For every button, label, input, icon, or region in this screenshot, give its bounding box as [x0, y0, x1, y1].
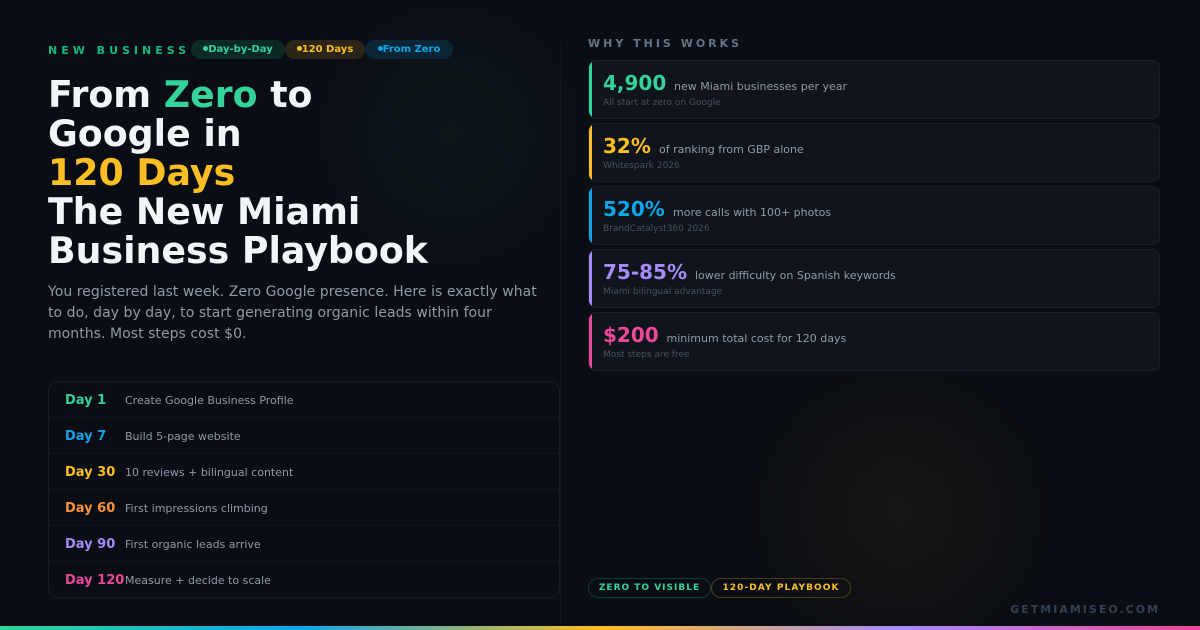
timeline row: day 7: Day 7: [65, 429, 106, 444]
stat card: 32%: Whitespark 2026: [603, 161, 680, 171]
stat card: 4,900: [588, 60, 1160, 119]
stat card: 520%: more calls with 100+ photos: [673, 206, 831, 219]
stat card: 520%: BrandCatalyst360 2026: [603, 224, 710, 234]
subtitle: [48, 284, 537, 342]
pill: 120 Days: [285, 40, 365, 59]
stat card: $200: minimum total cost for 120 days: [666, 332, 846, 345]
timeline row: day 60: [49, 490, 559, 526]
subtitle: to do, day by day, to start generating organic leads within four: [48, 305, 492, 321]
stat card: 32%: of ranking from GBP alone: [659, 143, 804, 156]
stat card: 4,900: 4,900: [603, 71, 666, 95]
pill: Day-by-Day: [191, 40, 285, 59]
stat card: 75-85%: 75-85%: [603, 260, 687, 284]
stat card: $200: Most steps are free: [603, 350, 690, 360]
tag: 120-day playbook: 120-DAY PLAYBOOK: [722, 583, 840, 593]
stat card: 32%: 32%: [603, 134, 651, 158]
title: The New Miami: [48, 190, 360, 233]
pill: Day-by-Day: Day-by-Day: [208, 44, 273, 55]
tag: 120-day playbook: [711, 578, 851, 598]
timeline row: day 90: Day 90: [65, 537, 115, 552]
pill: From Zero: [365, 40, 453, 59]
stat card: 75-85%: lower difficulty on Spanish keywords: [695, 269, 896, 282]
stat card: 4,900: new Miami businesses per year: [674, 80, 847, 93]
tag: zero to visible: ZERO TO VISIBLE: [599, 583, 700, 593]
stat card: 32%: [588, 123, 1160, 182]
stat card: 520%: 520%: [603, 197, 665, 221]
timeline row: day 30: [49, 454, 559, 490]
timeline row: day 90: First organic leads arrive: [125, 538, 261, 551]
stat card: $200: [588, 312, 1160, 371]
title: Business Playbook: [48, 229, 428, 272]
panel divider: [560, 0, 561, 626]
timeline row: day 120: Day 120: [65, 573, 124, 588]
stat card: 75-85%: [588, 249, 1160, 308]
pill: 120 Days: 120 Days: [302, 44, 353, 55]
eyebrow label: NEW BUSINESS: [48, 44, 190, 57]
subtitle: You registered last week. Zero Google presence. Here is exactly what: [48, 284, 537, 300]
title: Google in: [48, 112, 242, 155]
title: From Zero to: [48, 73, 312, 116]
subtitle: months. Most steps cost $0.: [48, 326, 247, 342]
pill: From Zero: From Zero: [383, 44, 440, 55]
timeline row: day 1: Create Google Business Profile: [125, 394, 294, 407]
stat card: 75-85%: Miami bilingual advantage: [603, 287, 722, 297]
timeline row: day 1: [49, 382, 559, 418]
stat card: $200: $200: [603, 323, 659, 347]
timeline row: day 60: Day 60: [65, 501, 115, 516]
timeline row: day 7: [49, 418, 559, 454]
timeline row: day 60: First impressions climbing: [125, 502, 268, 515]
stat card: 520%: [588, 186, 1160, 245]
timeline row: day 7: Build 5-page website: [125, 430, 241, 443]
stat card: 4,900: All start at zero on Google: [603, 98, 721, 108]
bottom gradient bar: [0, 626, 1200, 630]
section heading: why this works: WHY THIS WORKS: [588, 37, 742, 50]
timeline row: day 1: Day 1: [65, 393, 106, 408]
timeline row: day 90: [49, 526, 559, 562]
tag: zero to visible: [588, 578, 711, 598]
title: 120 Days: [48, 151, 235, 194]
title: [48, 73, 428, 272]
timeline row: day 30: Day 30: [65, 465, 115, 480]
website footer: GETMIAMISEO.COM: [1010, 603, 1160, 616]
panel: timeline: [48, 381, 560, 598]
timeline row: day 120: Measure + decide to scale: [125, 574, 271, 587]
timeline row: day 30: 10 reviews + bilingual content: [125, 466, 293, 479]
timeline row: day 120: [65, 573, 271, 588]
